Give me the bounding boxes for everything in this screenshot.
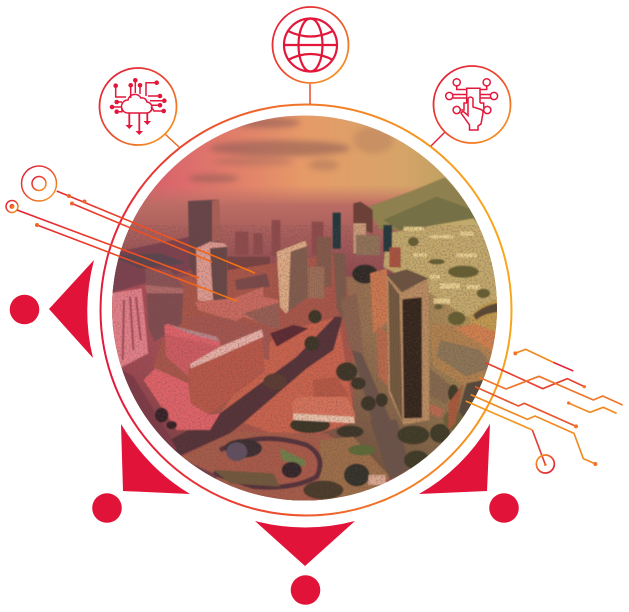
dark tree bottom left: [155, 408, 168, 422]
low right block: [430, 369, 450, 403]
connector: globe icon: [309, 84, 311, 104]
outer ring: [100, 104, 512, 516]
trees right bottom: [397, 385, 463, 469]
dot: bottom: [291, 575, 320, 605]
big hotel: [222, 318, 270, 360]
icon: cloud network: [100, 68, 176, 145]
hills right: [368, 177, 476, 232]
mid-rise behind left: [145, 268, 183, 342]
arrow: left triangle: [49, 260, 94, 358]
dark trees behind: [352, 265, 378, 283]
ground mass: [153, 253, 353, 440]
white tower: [196, 242, 227, 303]
left road area: [110, 288, 148, 373]
arrow: bottom triangle: [255, 521, 355, 566]
icon: hand on touch network: [434, 66, 510, 143]
colonial building: [292, 397, 355, 423]
arrow: bottom-right triangle: [419, 424, 490, 494]
red courtyard block: [270, 325, 308, 347]
mid blocks: [235, 273, 270, 290]
centre building: [277, 241, 308, 313]
main avenue: [170, 317, 343, 457]
photo grain: [110, 225, 500, 505]
dot: bottom-right: [489, 493, 519, 523]
lower trees: [263, 310, 388, 438]
dot: bottom-left: [92, 493, 122, 523]
roundabout: [213, 439, 320, 487]
city photo: [110, 110, 503, 505]
tower A: [188, 199, 220, 277]
icon: globe: [272, 7, 348, 83]
far city fading into the haze: [114, 188, 415, 277]
target: small circle: [6, 200, 18, 212]
right tower: [370, 268, 390, 333]
second road: [352, 350, 390, 420]
plaza left: [143, 368, 220, 430]
target: large circle: [22, 166, 56, 201]
dot: left: [10, 295, 39, 324]
right field: [430, 324, 492, 386]
bullring: [470, 300, 497, 332]
circuit lines: right: [466, 349, 623, 473]
arrow: bottom-left triangle: [121, 424, 190, 494]
centre ground: [220, 317, 355, 442]
clouds: [188, 117, 393, 182]
connector: hand icon: [431, 132, 445, 146]
circuit lines: left: [17, 191, 255, 301]
far towers: [235, 220, 323, 257]
right yellow neighbourhood: [383, 218, 503, 317]
connector: cloud icon: [165, 134, 179, 147]
bottom ground: [177, 432, 397, 503]
